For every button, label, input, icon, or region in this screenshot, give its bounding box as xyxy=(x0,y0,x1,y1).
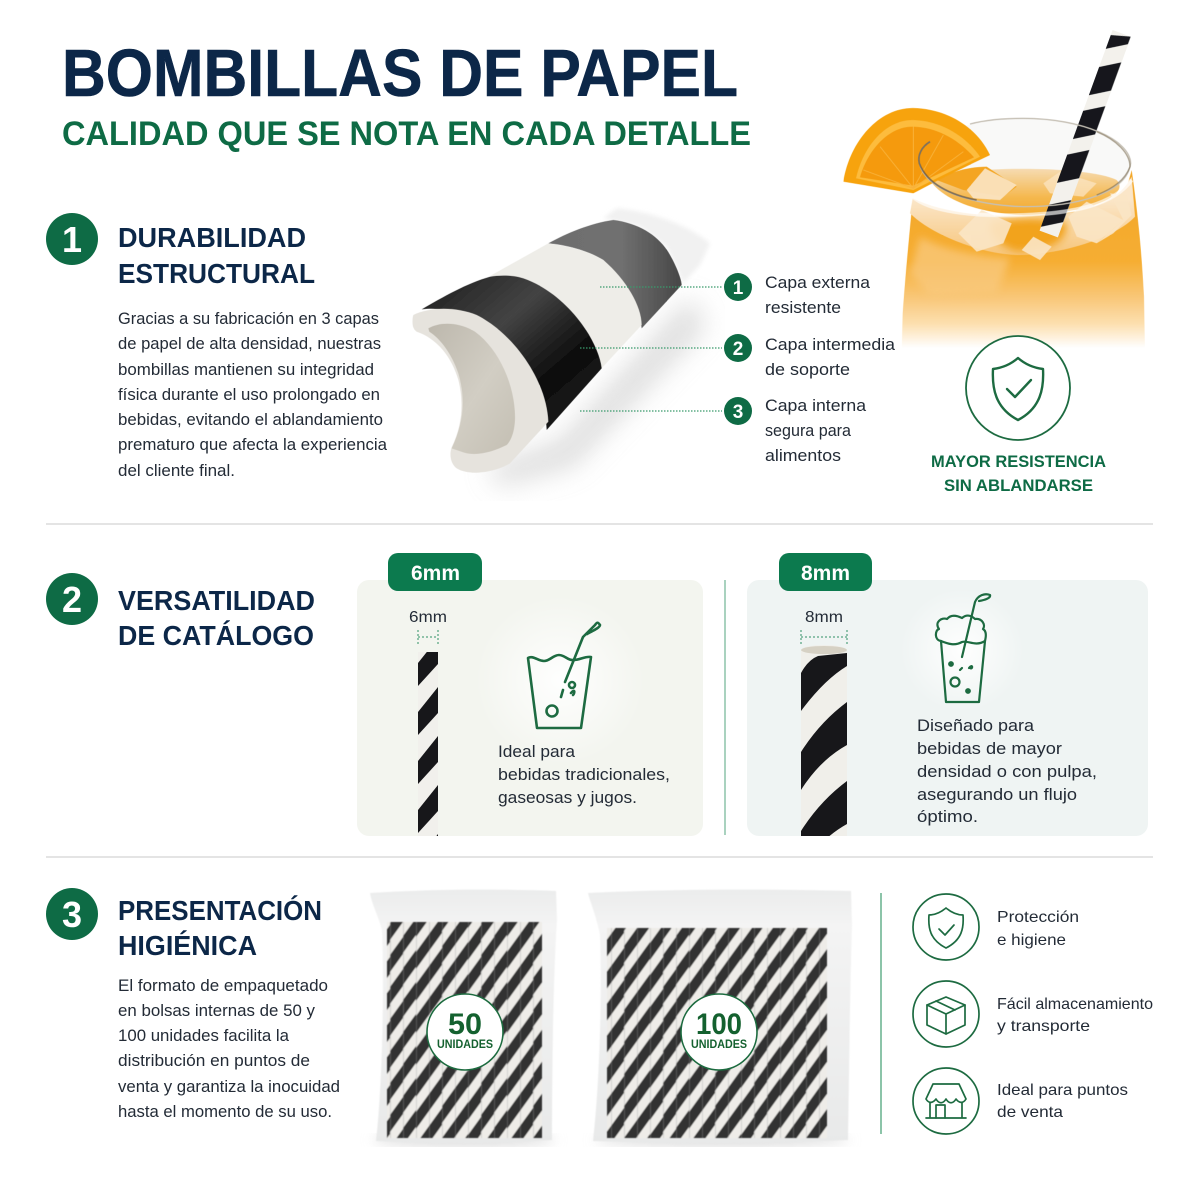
callout 3: capa interna xyxy=(724,396,867,465)
icon: shield badge xyxy=(966,336,1070,440)
text: 8mm description: densidad o con pulpa, xyxy=(917,762,1097,781)
tab: 6mm: 6mm xyxy=(411,562,460,585)
benefit: facil almacenamiento: y transporte xyxy=(997,1018,1090,1035)
body text: durabilidad: Gracias a su fabricación en 3 capas xyxy=(118,310,379,328)
heading: presentacion higienica: HIGIÉNICA xyxy=(118,930,257,961)
number badge 3: 3 xyxy=(62,894,82,935)
straw: 6mm striped xyxy=(418,652,438,836)
text: 8mm description: Diseñado para xyxy=(917,716,1035,735)
heading: durabilidad estructural xyxy=(118,222,315,289)
body text: presentacion: hasta el momento de su uso. xyxy=(118,1103,332,1121)
benefit: proteccion e higiene xyxy=(913,894,1079,960)
benefit: proteccion e higiene: Protección xyxy=(997,909,1079,926)
panel: 6mm xyxy=(357,553,703,836)
heading: presentacion higienica: PRESENTACIÓN xyxy=(118,895,322,926)
benefit: puntos de venta xyxy=(913,1068,1128,1134)
icon: glow behind tall glass xyxy=(900,588,1024,712)
number badge 2: 2 xyxy=(62,579,82,620)
callout 2: capa intermedia: de soporte xyxy=(765,360,850,379)
callout: mayor resistencia: MAYOR RESISTENCIA xyxy=(931,452,1106,471)
callout 3: capa interna: Capa interna xyxy=(765,396,867,415)
text: 6mm description: bebidas tradicionales, xyxy=(498,765,670,784)
callout: mayor resistencia xyxy=(931,452,1106,495)
body text: presentacion xyxy=(118,977,340,1121)
body text: durabilidad: física durante el uso prolongado en xyxy=(118,386,380,404)
icon: tall glass with foam and straw xyxy=(936,594,990,702)
callout 1: capa externa xyxy=(724,273,871,317)
heading: durabilidad estructural: DURABILIDAD xyxy=(118,222,306,253)
callout 2: capa intermedia: Capa intermedia xyxy=(765,335,896,354)
icon: shield xyxy=(913,894,979,960)
panel: 8mm xyxy=(747,553,1148,869)
tab: 8mm: 8mm xyxy=(801,562,850,585)
callout 3: capa interna: segura para xyxy=(765,421,852,440)
photo: orange drink glass with straw xyxy=(840,30,1145,353)
badge: 100 unidades: 100 xyxy=(696,1008,742,1041)
dimension label: 6mm xyxy=(409,609,447,646)
callout 1: capa externa: Capa externa xyxy=(765,273,871,292)
callout 3: capa interna: 3 xyxy=(733,402,743,423)
benefit: facil almacenamiento: Fácil almacenamiento xyxy=(997,996,1153,1013)
callout 3: capa interna: alimentos xyxy=(765,446,841,465)
text: 6mm description: Ideal para xyxy=(498,742,576,761)
badge: 50 unidades xyxy=(427,994,503,1070)
callout 1: capa externa: resistente xyxy=(765,298,841,317)
body text: presentacion: venta y garantiza la inocuidad xyxy=(118,1078,340,1096)
icon: glass with straw xyxy=(528,623,600,728)
dimension label: 8mm: 8mm xyxy=(805,609,843,626)
body text: durabilidad: bebidas, evitando el ablandamiento xyxy=(118,411,383,429)
heading: durabilidad estructural: ESTRUCTURAL xyxy=(118,258,315,289)
text: 8mm description: óptimo. xyxy=(917,807,978,826)
title: BOMBILLAS DE PAPEL xyxy=(62,36,738,111)
body text: durabilidad: de papel de alta densidad, nuestras xyxy=(118,335,381,353)
dimension label: 8mm xyxy=(801,609,847,645)
text: 6mm description: gaseosas y jugos. xyxy=(498,788,637,807)
body text: durabilidad: prematuro que afecta la experiencia xyxy=(118,436,388,454)
subtitle: CALIDAD QUE SE NOTA EN CADA DETALLE xyxy=(62,115,751,153)
body text: presentacion: en bolsas internas de 50 y xyxy=(118,1002,316,1020)
icon: store xyxy=(913,1068,979,1134)
heading: versatilidad de catalogo xyxy=(118,585,315,651)
straw: 8mm striped xyxy=(801,645,847,836)
photo: bag of 100 straws xyxy=(588,890,852,1145)
section 1: durabilidad estructural xyxy=(46,208,1106,495)
number badge 1 xyxy=(46,213,98,265)
badge: 100 unidades xyxy=(681,994,757,1070)
benefit: puntos de venta: Ideal para puntos xyxy=(997,1082,1128,1099)
section 3: presentacion higienica xyxy=(46,888,1153,1145)
icon: box xyxy=(913,981,979,1047)
body text: presentacion: El formato de empaquetado xyxy=(118,977,328,995)
badge: 50 unidades: 50 xyxy=(448,1008,482,1041)
badge: 100 unidades: UNIDADES xyxy=(691,1039,747,1051)
section 2: versatilidad de catalogo xyxy=(46,553,1148,882)
body text: durabilidad xyxy=(118,310,388,480)
icon: glow behind glass xyxy=(475,595,645,765)
number badge 1: 1 xyxy=(62,219,82,260)
benefit: puntos de venta: de venta xyxy=(997,1104,1063,1121)
heading: versatilidad de catalogo: VERSATILIDAD xyxy=(118,585,315,616)
text: 8mm description xyxy=(917,716,1097,826)
callout: mayor resistencia: SIN ABLANDARSE xyxy=(944,476,1093,495)
text: 8mm description: asegurando un flujo xyxy=(917,785,1077,804)
number badge 2 xyxy=(46,573,98,625)
heading: presentacion higienica xyxy=(118,895,322,961)
dimension label: 6mm: 6mm xyxy=(409,609,447,626)
callout 1: capa externa: 1 xyxy=(733,278,744,299)
body text: presentacion: distribución en puntos de xyxy=(118,1052,310,1070)
photo: bag of 50 straws xyxy=(370,890,557,1145)
callout leader lines xyxy=(580,287,722,411)
badge: 50 unidades: UNIDADES xyxy=(437,1039,493,1051)
tab: 6mm xyxy=(388,553,482,591)
callout 2: capa intermedia xyxy=(724,334,896,379)
callout 2: capa intermedia: 2 xyxy=(733,339,743,360)
tab: 8mm xyxy=(779,553,872,591)
benefit: facil almacenamiento xyxy=(913,981,1153,1047)
text: 6mm description xyxy=(498,742,670,807)
text: 8mm description: bebidas de mayor xyxy=(917,739,1062,758)
heading: versatilidad de catalogo: DE CATÁLOGO xyxy=(118,620,314,651)
photo: cutaway straw layers xyxy=(412,208,710,487)
number badge 3 xyxy=(46,888,98,940)
body text: durabilidad: bombillas mantienen su integridad xyxy=(118,361,374,379)
body text: presentacion: 100 unidades facilita la xyxy=(118,1027,290,1045)
body text: durabilidad: del cliente final. xyxy=(118,462,235,480)
benefit: proteccion e higiene: e higiene xyxy=(997,932,1066,949)
